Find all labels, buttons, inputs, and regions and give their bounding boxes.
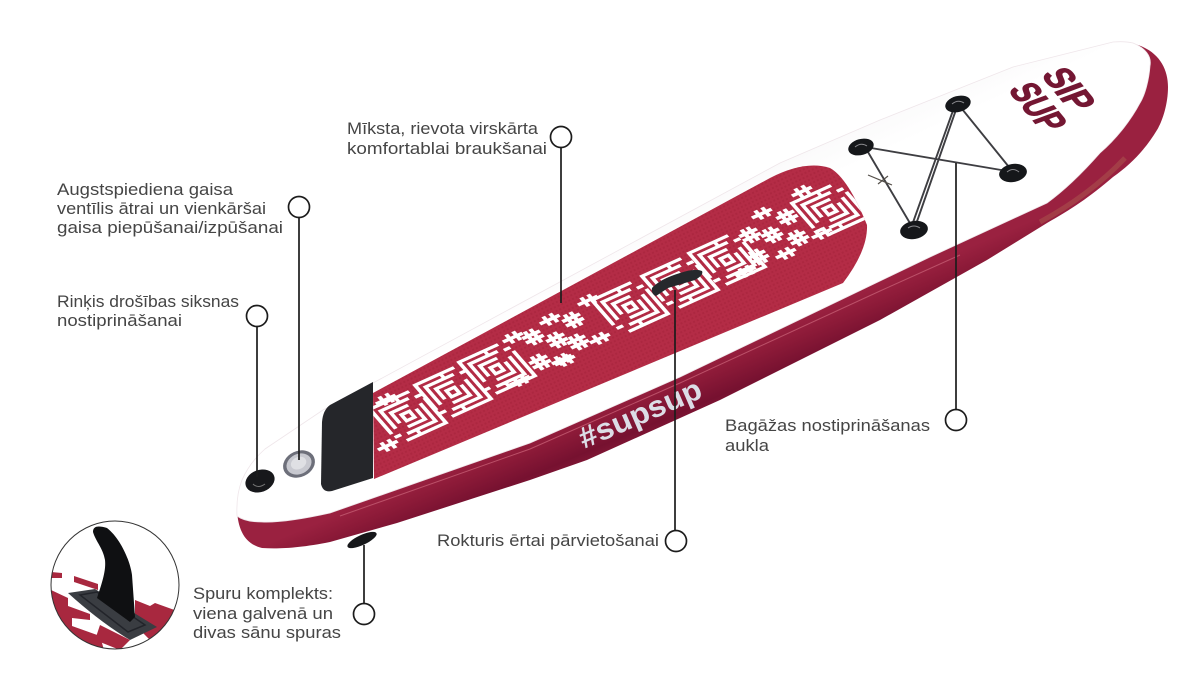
callout: soft deck: komfortablai braukšanai xyxy=(347,140,547,158)
callout: soft deck: Mīksta, rievota virskārta xyxy=(347,120,539,138)
callout: leash ring: nostiprināšanai xyxy=(57,312,182,330)
carry handle xyxy=(652,270,702,296)
callout: fins: viena galvenā un xyxy=(193,605,333,623)
callout: handle xyxy=(437,290,686,552)
pad ornament band xyxy=(370,182,868,454)
fin base xyxy=(68,589,157,640)
fin inset xyxy=(51,521,180,650)
leash ring xyxy=(242,466,278,496)
traction pad xyxy=(321,166,868,491)
bungee cord and anchors xyxy=(846,93,1028,241)
callout: air valve xyxy=(57,181,310,460)
callout: handle: Rokturis ērtai pārvietošanai xyxy=(437,532,659,550)
hashtag on board side: #supsup xyxy=(574,373,707,455)
callout: air valve: gaisa piepūšanai/izpūšanai xyxy=(57,219,283,237)
callout: air valve: Augstspiediena gaisa xyxy=(57,181,234,199)
callout: luggage cord: aukla xyxy=(725,437,770,455)
air valve xyxy=(279,445,319,483)
underside fin xyxy=(345,529,379,551)
board side tube xyxy=(237,42,1168,548)
callout: fins: divas sānu spuras xyxy=(193,624,341,642)
logo: SIP SUP xyxy=(999,63,1104,137)
inset deck pattern xyxy=(51,572,180,650)
callout: luggage cord xyxy=(725,163,966,455)
fin blade xyxy=(93,527,135,622)
callout: leash ring: Rinķis drošības siksnas xyxy=(57,293,239,311)
callout: luggage cord: Bagāžas nostiprināšanas xyxy=(725,417,930,435)
paddle board xyxy=(237,42,1168,551)
logo: SIP SUP: SIP xyxy=(1032,63,1104,116)
callout: leash ring xyxy=(57,293,268,477)
callout: fins: Spuru komplekts: xyxy=(193,585,333,603)
side highlight seam xyxy=(340,255,960,516)
callout: air valve: ventīlis ātrai un vienkāršai xyxy=(57,200,266,218)
callout: fins xyxy=(193,545,374,642)
board top deck xyxy=(237,42,1150,522)
logo: SIP SUP: SUP xyxy=(999,78,1076,137)
black tail grip xyxy=(321,382,373,491)
callout: soft deck xyxy=(347,120,572,303)
